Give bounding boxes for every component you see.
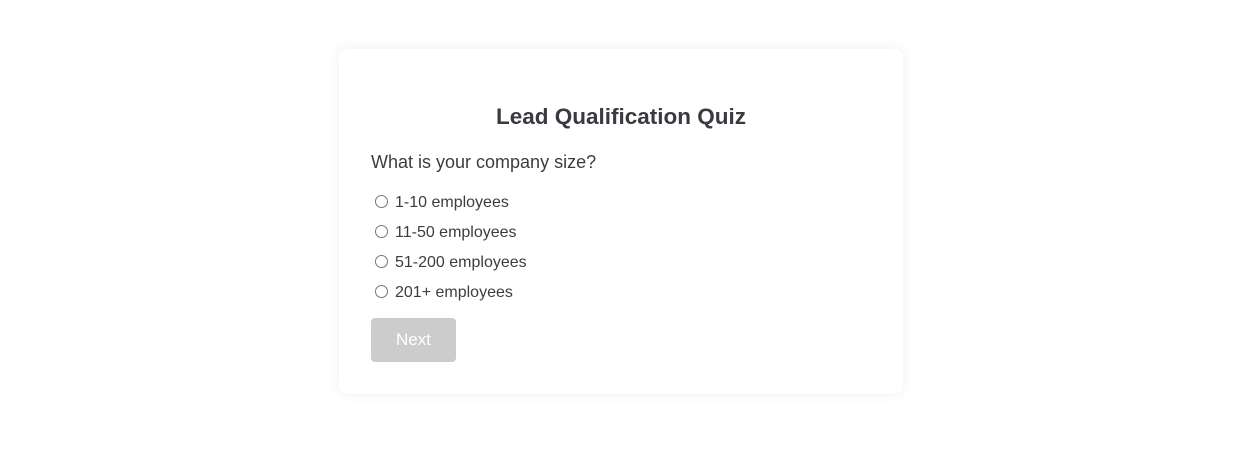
option 2: 11-50 employees xyxy=(395,224,517,241)
button: next: Next xyxy=(396,330,431,349)
title: Lead Qualification Quiz xyxy=(496,104,746,129)
option 3: 51-200 employees xyxy=(395,254,527,271)
option 1: 1-10 employees xyxy=(395,194,509,211)
question: What is your company size? xyxy=(371,152,596,172)
option 4: 201+ employees xyxy=(395,284,513,301)
card: quiz xyxy=(339,49,903,394)
button: next xyxy=(371,318,456,362)
